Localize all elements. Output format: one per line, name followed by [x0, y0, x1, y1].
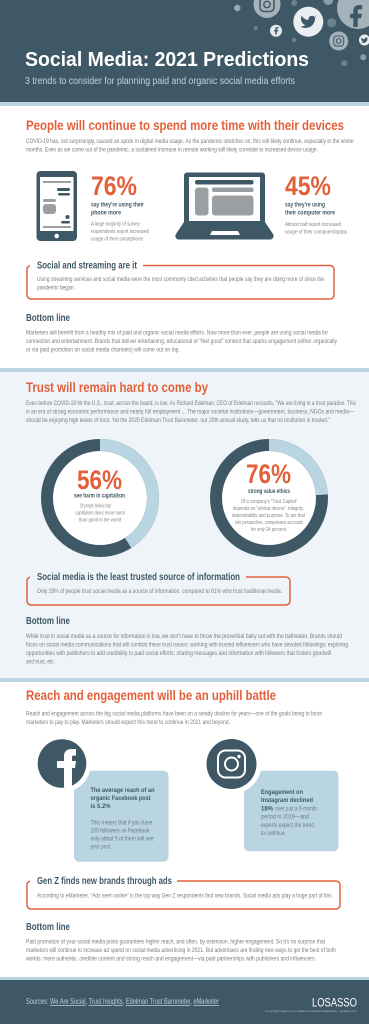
donut chart: 76%: Of a company’s “Trust Capital” — [241, 499, 297, 505]
stat: 45% computer: 45% — [285, 171, 331, 201]
intro text — [26, 400, 356, 424]
section 2: trust — [0, 368, 369, 682]
stat: 45% computer: usage of their computer/laptop — [285, 230, 347, 236]
icon: instagram — [206, 739, 256, 789]
icon: laptop — [175, 172, 274, 240]
intro text: marketers to pay to play. Marketers should expect this trend to continue in 2021 and beyond. — [26, 719, 230, 726]
sources: Sources: We Are Social, Trust Insights, Edelman Trust Barometer, eMarketer — [26, 997, 219, 1006]
stat: 76% phone: 76% — [91, 171, 137, 201]
donut chart: 76%: strong value ethics — [248, 489, 291, 495]
title: Social Media: 2021 Predictions — [25, 49, 309, 71]
stat: 45% computer: say they’re using — [285, 203, 325, 209]
bottom line 1: Bottom line — [26, 313, 70, 324]
donut chart: 76%: into perspective, competence accounts — [235, 520, 303, 526]
callout: least trusted source: Only 29% of people trust social media as a source of information, compared to 61% who trust traditional media. — [37, 588, 282, 595]
donut chart: 56%: than good in the world — [79, 518, 121, 524]
card: instagram: experts expect the trend — [261, 822, 314, 829]
bottom line 3 — [25, 922, 336, 962]
card: instagram: 18% — [261, 806, 273, 812]
stat: 76% phone: phone more — [91, 210, 122, 216]
donut chart: 76% — [216, 445, 322, 551]
card: instagram — [202, 734, 338, 851]
card: instagram: to continue. — [261, 830, 286, 837]
heading: Trust will remain hard to come by — [26, 379, 208, 395]
callout: social and streaming: pandemic began. — [37, 284, 75, 292]
header banner — [0, 0, 369, 106]
section 1: devices — [26, 117, 355, 354]
card: instagram: period in 2019—and — [261, 814, 309, 821]
card: facebook: This means that if you have — [90, 820, 153, 826]
bottom line 1 — [26, 313, 338, 354]
card: facebook: is 5.2% — [90, 803, 111, 810]
card: facebook: your post. — [90, 844, 112, 850]
bottom line 2 — [26, 616, 348, 666]
footer — [0, 977, 369, 1024]
donut chart: 56%: 56% — [77, 465, 122, 495]
donut chart: 76%: dependability and purpose. To put that — [232, 513, 305, 519]
donut chart: 56%: Of people believe that — [80, 504, 111, 510]
donut chart: 76%: depends on “ethical drivers”: integrity, — [233, 506, 304, 512]
donut chart: 76%: for only 24 percent. — [251, 527, 287, 533]
icon: social media bubbles — [234, 0, 369, 66]
callout: least trusted source: Social media is the least trusted source of information — [37, 572, 240, 583]
donut chart: 76%: 76% — [246, 459, 291, 489]
card: facebook — [33, 734, 168, 862]
bottom line 3: Bottom line — [26, 922, 70, 933]
callout: least trusted source — [27, 572, 290, 605]
stat: 45% computer: their computer more — [285, 210, 336, 216]
icon: facebook — [38, 739, 86, 788]
bottom line 2: Bottom line — [26, 616, 70, 627]
card: instagram: over just a 6-month — [275, 806, 317, 812]
callout: social and streaming: Social and streaming are it — [37, 260, 138, 272]
card: facebook: only about 5 of them will see — [90, 836, 154, 842]
callout: gen z: Gen Z finds new brands through ads — [37, 876, 172, 887]
card: facebook: 100 followers on Facebook — [90, 828, 150, 834]
stat: 76% phone: respondents report increased — [91, 229, 149, 235]
stat: 45% computer — [285, 171, 347, 236]
donut chart: 56% — [47, 445, 153, 551]
card: facebook: organic Facebook post — [90, 795, 151, 802]
section 3: reach and engagement — [25, 687, 340, 962]
callout: social and streaming — [27, 260, 334, 299]
callout: gen z — [27, 876, 340, 909]
bottom line 2: and trust; etc. — [26, 658, 55, 666]
card: facebook: The average reach of an — [90, 787, 154, 794]
donut chart: 56%: see harm in capitalism — [74, 494, 125, 500]
stat: 76% phone: usage of their smartphone — [91, 236, 143, 242]
icon: phone — [36, 171, 77, 241]
heading: Reach and engagement will be an uphill battle — [26, 687, 276, 703]
card: instagram: Engagement on — [261, 789, 303, 796]
stat: 76% phone: say they’re using their — [91, 203, 145, 209]
stat: 45% computer: Almost half report increased — [285, 222, 341, 228]
logo: losasso: LOSASSO — [312, 998, 357, 1010]
intro text — [26, 138, 355, 154]
credit line: Copyright imagery by LoSasso Integrated Marketing · losasso.com — [265, 1009, 358, 1013]
stat: 76% phone: A large majority of survey — [91, 222, 140, 228]
bottom line 1: or via paid promotion on social media channels) will come out on top. — [26, 346, 180, 354]
intro text — [26, 710, 322, 726]
card: instagram: Instagram declined — [261, 797, 313, 804]
subtitle: 3 trends to consider for planning paid and organic social media efforts — [25, 75, 295, 87]
stat: 76% phone — [91, 171, 149, 242]
donut chart: 56%: capitalism does more harm — [75, 510, 125, 516]
